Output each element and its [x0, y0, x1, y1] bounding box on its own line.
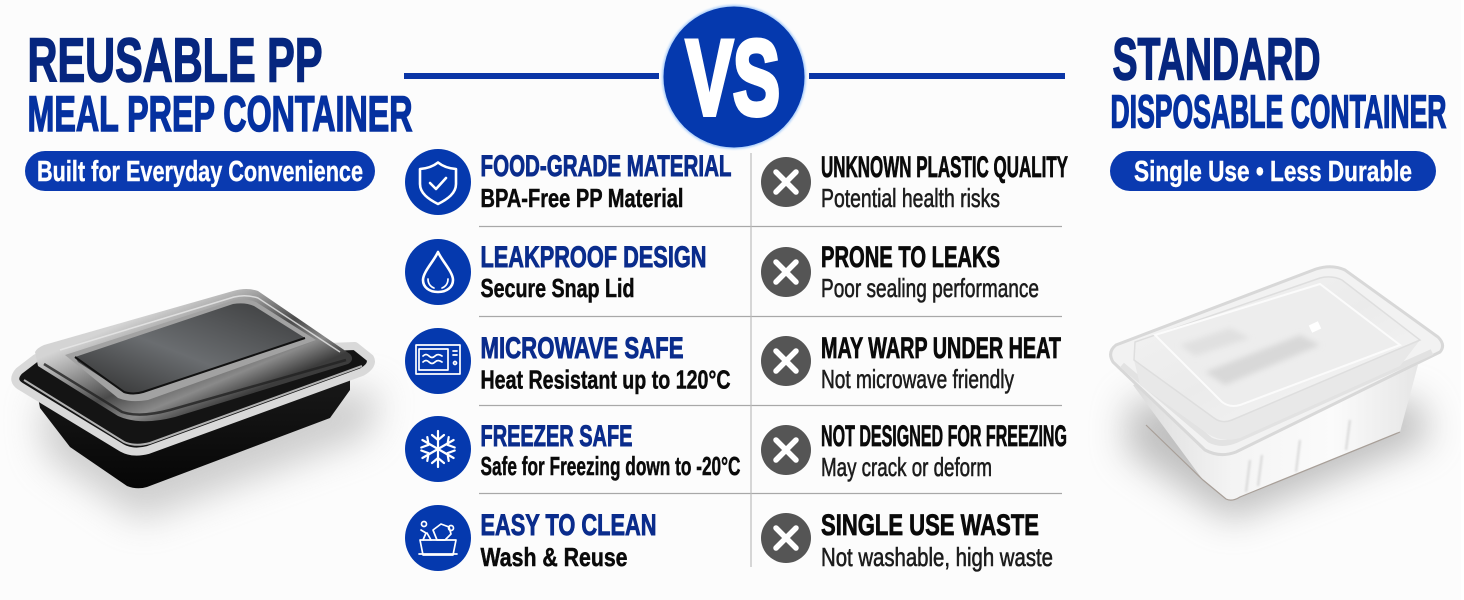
icon: x mark	[761, 247, 811, 297]
rim	[1111, 267, 1443, 455]
row: leakproof design: LEAKPROOF DESIGN	[480, 241, 706, 274]
row: unknown plastic quality: UNKNOWN PLASTIC QUALITY	[821, 151, 1068, 184]
row: easy to clean: EASY TO CLEAN	[480, 509, 656, 542]
row: food-grade material	[405, 149, 732, 215]
row: food-grade material: FOOD-GRADE MATERIAL	[480, 150, 732, 183]
lid panel	[75, 303, 305, 394]
lid	[1134, 277, 1420, 422]
row: prone to leaks: Poor sealing performance	[821, 273, 1039, 303]
row: may warp under heat	[761, 332, 1061, 394]
base bottom edge	[1146, 425, 1400, 500]
row: may warp under heat: Not microwave friendly	[821, 364, 1014, 394]
row: leakproof design: Secure Snap Lid	[480, 273, 634, 303]
row: freezer safe	[405, 416, 741, 482]
lid highlight	[1309, 321, 1321, 333]
lid dark band	[44, 360, 346, 415]
subtitle: meal prep container: MEAL PREP CONTAINER	[28, 86, 412, 142]
rim	[15, 346, 371, 452]
row: prone to leaks	[761, 241, 1039, 303]
VS badge	[662, 5, 806, 149]
base	[33, 358, 350, 488]
icon: x mark	[761, 513, 811, 563]
row: leakproof design	[405, 239, 706, 305]
row: unknown plastic quality	[761, 151, 1068, 213]
icon: water drop	[405, 239, 471, 305]
lid panel	[1155, 284, 1400, 406]
icon: x mark	[761, 425, 811, 475]
row: may warp under heat: MAY WARP UNDER HEAT	[821, 332, 1061, 365]
row: microwave safe	[405, 328, 731, 394]
VS badge: VS	[686, 18, 780, 138]
rim lower band	[1122, 352, 1432, 443]
lid inner edge	[65, 299, 316, 401]
row: prone to leaks: PRONE TO LEAKS	[821, 241, 1000, 274]
row: unknown plastic quality: Potential health risks	[821, 183, 1000, 213]
row: microwave safe: MICROWAVE SAFE	[480, 332, 684, 365]
left pill: Built for Everyday Convenience	[37, 156, 363, 188]
icon: x mark	[761, 157, 811, 207]
row: single use waste: Not washable, high waste	[821, 542, 1053, 572]
right pill	[1110, 151, 1436, 191]
lid back highlight	[60, 296, 340, 352]
shadow	[40, 390, 380, 520]
row: not designed for freezing: NOT DESIGNED FOR FREEZING	[821, 420, 1067, 453]
VS divider lines	[404, 73, 1065, 79]
icon: shield	[405, 149, 471, 215]
row: not designed for freezing	[761, 420, 1067, 482]
row: freezer safe: Safe for Freezing down to -20°C	[480, 451, 741, 481]
base	[1133, 340, 1418, 500]
base streaks	[1246, 420, 1350, 492]
lid	[35, 289, 352, 421]
left heading: reusable PP	[28, 26, 412, 142]
icon: wash tub	[405, 505, 471, 571]
lid skirt	[1134, 340, 1420, 440]
right heading: standard disposable	[1110, 26, 1446, 138]
shadow	[1125, 400, 1430, 520]
row: microwave safe: Heat Resistant up to 120°C	[480, 364, 731, 394]
row: single use waste: SINGLE USE WASTE	[821, 509, 1039, 542]
icon: snowflake	[405, 416, 471, 482]
edge strip	[1461, 0, 1464, 600]
product image: clear disposable container	[1111, 267, 1443, 520]
row: food-grade material: BPA-Free PP Material	[480, 183, 684, 213]
row: easy to clean: Wash & Reuse	[480, 542, 628, 572]
icon: x mark	[761, 336, 811, 386]
title line: reusable PP: REUSABLE PP	[28, 26, 322, 96]
product image: black PP container	[15, 289, 380, 520]
row: freezer safe: FREEZER SAFE	[480, 420, 632, 453]
title line: standard: STANDARD	[1112, 26, 1320, 92]
lid smudges	[1205, 335, 1320, 385]
row: single use waste	[761, 509, 1053, 572]
comparison table dividers	[479, 153, 1062, 567]
icon: microwave	[405, 328, 471, 394]
row: easy to clean	[405, 505, 656, 572]
left pill	[25, 151, 375, 191]
row: not designed for freezing: May crack or deform	[821, 452, 992, 482]
